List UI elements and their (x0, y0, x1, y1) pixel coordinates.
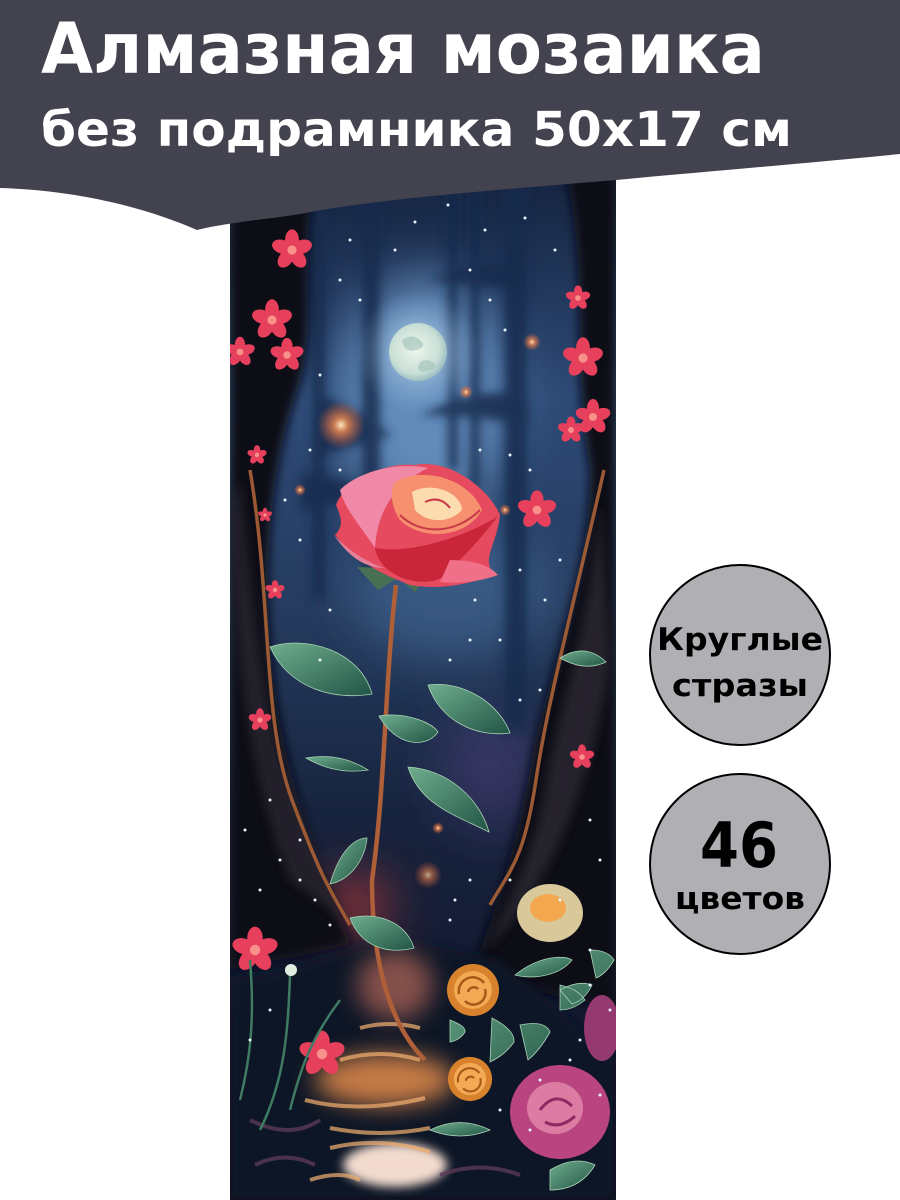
badge: round rhinestones (650, 565, 830, 745)
badge: round rhinestones: стразы (672, 668, 808, 704)
header banner (0, 0, 900, 230)
badge: 46 colours: 46 (700, 809, 778, 882)
moon (362, 299, 474, 402)
glowing orbs (294, 333, 541, 889)
foreground roses (447, 884, 620, 1159)
forest sky (230, 170, 616, 1200)
water stream (230, 942, 616, 1200)
badge: 46 colours (650, 774, 830, 954)
green leaves (270, 643, 614, 1190)
left and right wild flowers (224, 229, 612, 1078)
painting: night forest rose (224, 170, 620, 1200)
trunk bark tone (232, 480, 610, 950)
main rose (334, 464, 500, 592)
left bank plants (240, 960, 340, 1130)
title: Алмазная мозаика (41, 8, 765, 90)
blue haze (320, 275, 550, 933)
blurred background trees (300, 170, 530, 730)
main stem (372, 585, 425, 1060)
sparkles (245, 205, 610, 1130)
subtitle: без подрамника 50х17 см (41, 102, 792, 158)
vines along trunks (250, 470, 604, 925)
dark foliage and side tree trunks (230, 170, 616, 1010)
badge: round rhinestones: Круглые (657, 622, 823, 658)
badge: 46 colours: цветов (675, 881, 805, 917)
